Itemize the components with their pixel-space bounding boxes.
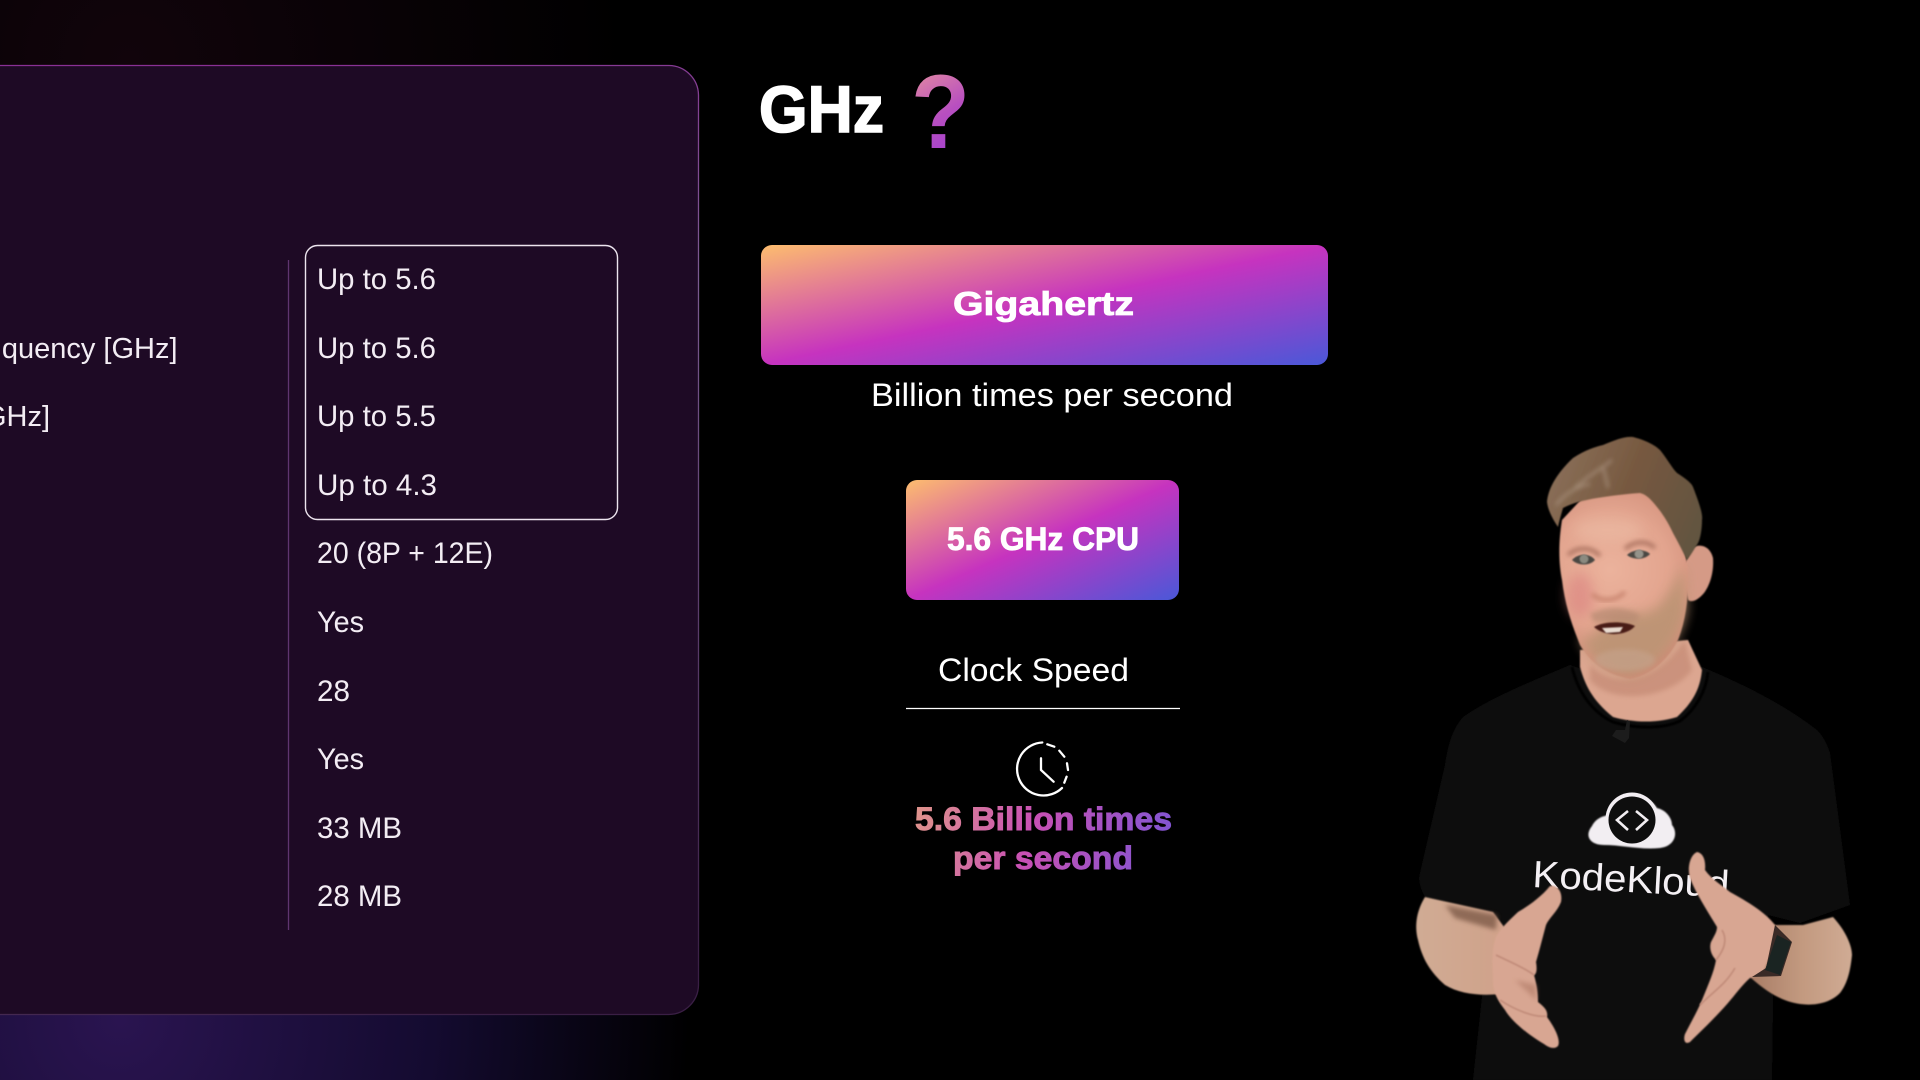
ear xyxy=(1682,546,1713,601)
neck shadow under jaw xyxy=(1590,640,1692,696)
other specification values: Yes xyxy=(317,606,364,639)
5.6 GHz CPU button: 5.6 GHz CPU xyxy=(947,521,1139,557)
neck xyxy=(1580,640,1702,722)
wristwatch xyxy=(1752,925,1792,977)
left eye xyxy=(1572,554,1595,564)
heading: GHz: GHz xyxy=(759,72,884,146)
collar xyxy=(1572,667,1708,727)
lapel microphone xyxy=(1612,720,1630,743)
other specification values xyxy=(317,537,493,913)
cheek redness xyxy=(1567,573,1593,617)
frequency values: Up to 5.6 xyxy=(317,263,436,296)
row label: frequency: quency [GHz] xyxy=(2,333,178,365)
hair highlights xyxy=(1556,460,1612,505)
other specification values: Yes xyxy=(317,743,364,776)
gradient callout text: per second xyxy=(953,840,1133,876)
eye socket shadows xyxy=(1568,542,1655,556)
top left glow xyxy=(0,0,720,66)
frequency values: Up to 5.5 xyxy=(317,400,436,433)
Gigahertz button xyxy=(761,245,1328,365)
Gigahertz button: Gigahertz xyxy=(953,285,1134,322)
other specification values: 28 MB xyxy=(317,880,402,913)
clock speed label: Clock Speed xyxy=(938,652,1129,688)
other specification values: 28 xyxy=(317,675,350,708)
other specification values: 33 MB xyxy=(317,812,402,845)
clock speed underline xyxy=(906,708,1180,710)
presenter xyxy=(1416,437,1852,1080)
t-shirt xyxy=(1419,665,1850,1080)
Gigahertz definition: Billion times per second xyxy=(871,377,1233,413)
left arm sleeve shadow xyxy=(1445,905,1497,930)
right eye xyxy=(1627,550,1650,559)
table column divider xyxy=(288,260,290,930)
nose shadow xyxy=(1592,592,1625,600)
face xyxy=(1559,485,1688,679)
frequency values: Up to 5.6 xyxy=(317,332,436,365)
panel: specification table xyxy=(0,66,698,1014)
mouth xyxy=(1594,622,1635,634)
right hand xyxy=(1684,852,1775,1043)
gradient callout text: 5.6 Billion times xyxy=(915,801,1172,837)
shirt logo wordmark: KodeKloud xyxy=(1532,854,1730,906)
frequency values: Up to 4.3 xyxy=(317,469,437,502)
moustache shadow xyxy=(1590,608,1640,622)
panel background xyxy=(0,66,698,1014)
forehead highlight xyxy=(1574,518,1642,542)
stubble xyxy=(1578,565,1686,677)
right arm xyxy=(1750,917,1852,1005)
5.6 GHz CPU button xyxy=(906,480,1179,600)
icon: clock xyxy=(1017,742,1068,795)
palm shadow xyxy=(1515,980,1536,1000)
gradient callout text xyxy=(915,801,1172,876)
chin stubble xyxy=(1595,649,1655,671)
other specification values: 20 (8P + 12E) xyxy=(317,537,493,570)
left arm xyxy=(1416,897,1510,995)
shirt logo cloud xyxy=(1588,792,1675,848)
frequency values xyxy=(317,263,437,502)
left hand xyxy=(1492,886,1561,1048)
heading question mark: ? xyxy=(911,54,970,171)
highlight box around frequency values xyxy=(306,246,618,520)
bottom left glow xyxy=(0,1014,720,1080)
hair xyxy=(1547,437,1702,560)
